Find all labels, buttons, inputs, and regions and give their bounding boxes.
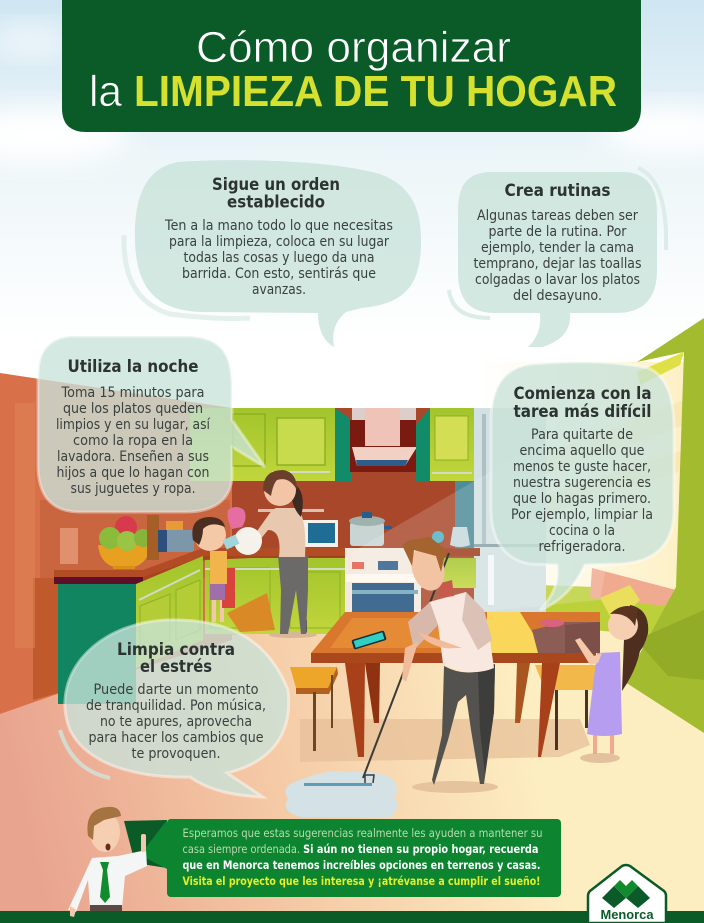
presenter character: [68, 807, 147, 917]
bottom band: [0, 911, 704, 923]
light beam: [352, 385, 640, 625]
body text: del desayuno.: [513, 288, 602, 304]
body text: cocina o la: [549, 523, 615, 539]
heading: [117, 640, 235, 677]
stove and oven: [345, 548, 421, 618]
line 1: Esperamos que estas sugerencias realmente les ayuden a mantener su: [182, 826, 542, 840]
body text: barrida. Con esto, sentirás que: [182, 266, 376, 282]
body text: encima aquello que: [520, 443, 644, 459]
heading: Utiliza la noche: [68, 357, 198, 377]
left wall: [0, 373, 232, 714]
background: sky: [0, 0, 704, 580]
body text: avanzas.: [252, 282, 306, 298]
body text: todas las cosas y luego da una: [184, 250, 374, 266]
wooden post: [147, 515, 159, 560]
heading: tarea más difícil: [514, 402, 652, 422]
heading: el estrés: [140, 657, 212, 677]
body text: refrigeradora.: [538, 539, 626, 555]
title line 1: Cómo organizar: [196, 23, 511, 72]
range hood: [350, 408, 417, 472]
right wall: [625, 318, 704, 733]
back wall and window light: [140, 362, 685, 660]
left chair: [290, 667, 338, 751]
body text: Para quitarte de: [531, 427, 633, 443]
body text: [164, 218, 393, 298]
heading: Comienza con la: [514, 384, 652, 404]
heading: Sigue un orden: [212, 175, 340, 195]
kettle: [432, 527, 470, 547]
floor: [0, 620, 704, 911]
line 4: Visita el proyecto que les interesa y ¡atrévanse a cumplir el sueño!: [182, 874, 540, 888]
title line 2: LIMPIEZA DE TU HOGAR: [134, 67, 617, 116]
shelf and microwave: [258, 509, 338, 547]
heading: [212, 175, 340, 212]
man mopping: [402, 537, 498, 793]
heading: establecido: [227, 192, 325, 212]
Menorca logo: [588, 865, 666, 923]
body text: como la ropa en la: [73, 433, 193, 449]
upper cabinet right: [416, 408, 475, 481]
woman washing dishes: [228, 470, 317, 638]
body text: nuestra sugerencia es: [513, 475, 651, 491]
box on table: [532, 619, 600, 653]
call to action box: [167, 819, 561, 897]
boy holding a glass: [192, 517, 239, 622]
body text: de tranquilidad. Pon música,: [86, 698, 266, 714]
island with counter: [54, 548, 345, 704]
body text: te provoquen.: [132, 746, 220, 762]
girl: [575, 605, 648, 763]
heading: Limpia contra: [117, 640, 235, 660]
body text: lavadora. Enseñen a sus: [57, 449, 209, 465]
upper cabinets left: [190, 408, 352, 481]
body text: que los platos queden: [63, 401, 203, 417]
bubble: Crea rutinas: [449, 168, 666, 347]
body text: colgadas o lavar los platos: [475, 272, 640, 288]
heading: Crea rutinas: [504, 181, 610, 201]
table: [311, 612, 600, 757]
Menorca logo: Menorca: [600, 907, 654, 922]
bubble: Utiliza la noche: [38, 336, 265, 512]
line 2: casa siempre ordenada. Si aún no tienen su propio hogar, recuerda: [182, 842, 538, 856]
body text: que lo hagas primero.: [513, 491, 651, 507]
body text: [474, 208, 642, 304]
body text: sus juguetes y ropa.: [70, 481, 196, 497]
body text: [86, 682, 266, 762]
right chair: [535, 665, 600, 750]
body text: limpios y en su lugar, así: [56, 417, 211, 433]
title banner: [62, 0, 641, 132]
kitchen room scene: [0, 318, 704, 911]
body text: Toma 15 minutos para: [61, 385, 205, 401]
body text: para la limpieza, coloca en su lugar: [169, 234, 389, 250]
bubble: Sigue un orden establecido: [124, 160, 421, 347]
chair behind the table: [227, 593, 307, 635]
body text: [56, 385, 211, 497]
body text: para hacer los cambios que: [88, 730, 264, 746]
fruit bowl: [98, 516, 152, 569]
body text: Puede darte un momento: [94, 682, 258, 698]
phone on table: [351, 630, 387, 650]
body text: temprano, dejar las toallas: [474, 256, 642, 272]
body text: menos te guste hacer,: [513, 459, 651, 475]
body text: Por ejemplo, limpiar la: [511, 507, 653, 523]
body text: parte de la rutina. Por: [488, 224, 627, 240]
megaphone: [124, 820, 167, 869]
bubble: Comienza con la tarea más difícil: [491, 362, 674, 610]
mop and puddle: [286, 553, 449, 817]
back counter and lower cabinets: [203, 548, 480, 634]
line 3: que en Menorca tenemos increíbles opciones en terrenos y casas.: [182, 858, 540, 872]
heading: [514, 384, 652, 422]
body text: Ten a la mano todo lo que necesitas: [164, 218, 393, 234]
toaster: [158, 521, 194, 552]
body text: ejemplo, tender la cama: [481, 240, 634, 256]
cooking pot: [349, 512, 392, 546]
body text: hijos a que lo hagan con: [56, 465, 210, 481]
body text: no te apures, aprovecha: [100, 714, 252, 730]
table shadow: [300, 719, 590, 762]
body text: [511, 427, 653, 555]
title line 2: la: [89, 67, 123, 116]
bubble: Limpia contra el estrés: [60, 620, 289, 797]
teal wall and fridge: [455, 408, 546, 616]
body text: Algunas tareas deben ser: [477, 208, 638, 224]
